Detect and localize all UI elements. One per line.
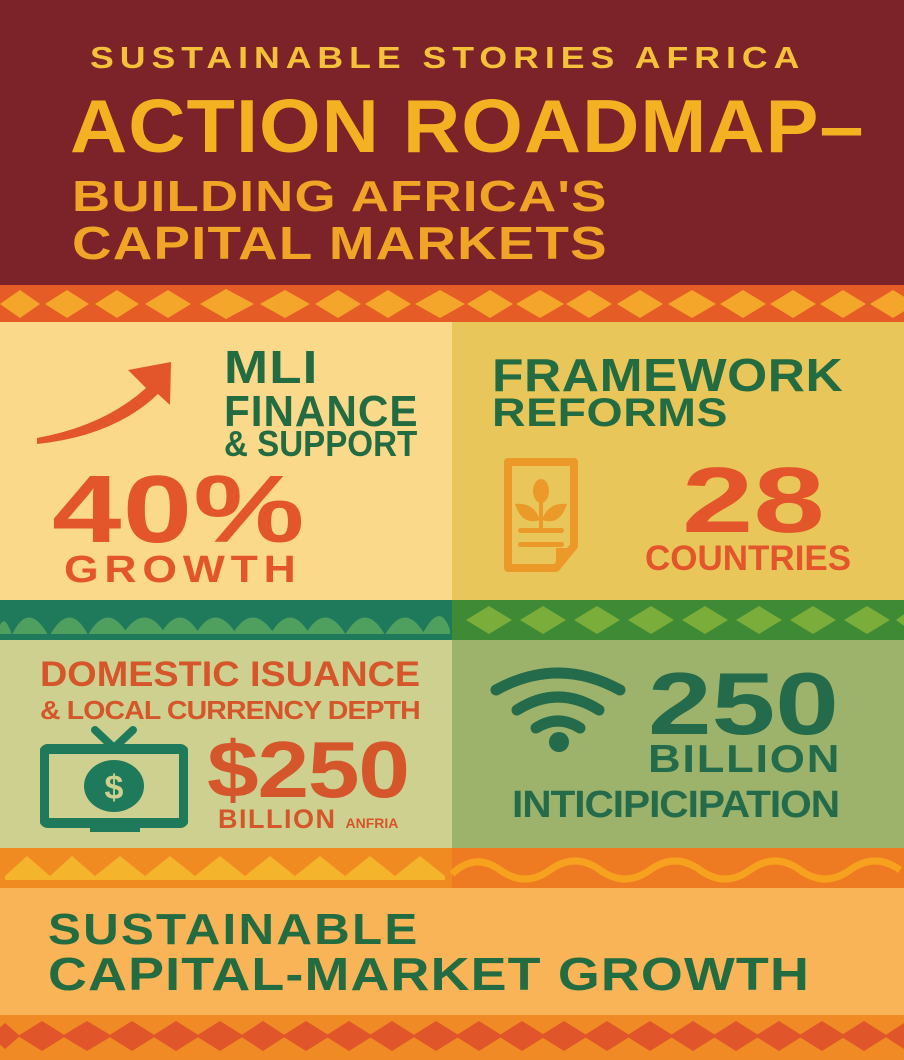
title: organisation: SUSTAINABLE STORIES AFRICA xyxy=(90,40,805,75)
stat label: participation: INTICIPICIPATION xyxy=(512,784,839,826)
panel: framework reforms xyxy=(452,322,904,600)
subtitle line 1: BUILDING AFRICA'S xyxy=(72,172,608,221)
heading: & support: & SUPPORT xyxy=(224,423,417,464)
icon: wifi xyxy=(490,668,626,752)
heading: MLI: MLI xyxy=(224,341,319,393)
stat label: growth: GROWTH xyxy=(64,549,302,591)
icon: document with plant xyxy=(504,458,578,572)
footer panel xyxy=(0,888,904,1015)
band: teal scallops and green diamonds xyxy=(0,600,904,640)
stat: 250: 250 xyxy=(648,654,839,753)
band: triangles and wave xyxy=(0,848,904,888)
stat: 40%: 40% xyxy=(52,456,306,563)
band: orange diamonds xyxy=(0,285,904,322)
title: main: ACTION ROADMAP– xyxy=(70,84,865,168)
heading: framework: FRAMEWORK xyxy=(492,349,843,401)
footer heading line 2: CAPITAL-MARKET GROWTH xyxy=(48,948,810,1000)
icon: growth arrow xyxy=(37,362,171,444)
icon: TV with dollar: $ xyxy=(105,769,124,807)
heading: domestic issuance: DOMESTIC ISUANCE xyxy=(40,655,420,694)
subheading: local currency depth: & LOCAL CURRENCY DEPTH xyxy=(40,695,420,725)
footer heading line 1: SUSTAINABLE xyxy=(48,905,419,954)
heading: reforms: REFORMS xyxy=(492,391,728,435)
panel: participation xyxy=(452,640,904,848)
stat: $250: $250 xyxy=(207,725,409,814)
stat label: billion anfria: BILLION ANFRIA xyxy=(218,804,398,834)
stat label: countries: COUNTRIES xyxy=(645,539,851,578)
subtitle line 2: CAPITAL MARKETS xyxy=(72,217,608,269)
panel: domestic issuance xyxy=(0,640,452,848)
band: bottom diamonds xyxy=(0,1015,904,1060)
stat label: billion: BILLION xyxy=(648,738,841,781)
icon: TV with dollar xyxy=(40,726,188,832)
panel: MLI finance & support xyxy=(0,322,452,600)
header panel xyxy=(0,0,904,285)
stat: 28: 28 xyxy=(682,448,825,552)
heading: finance: FINANCE xyxy=(224,387,418,436)
